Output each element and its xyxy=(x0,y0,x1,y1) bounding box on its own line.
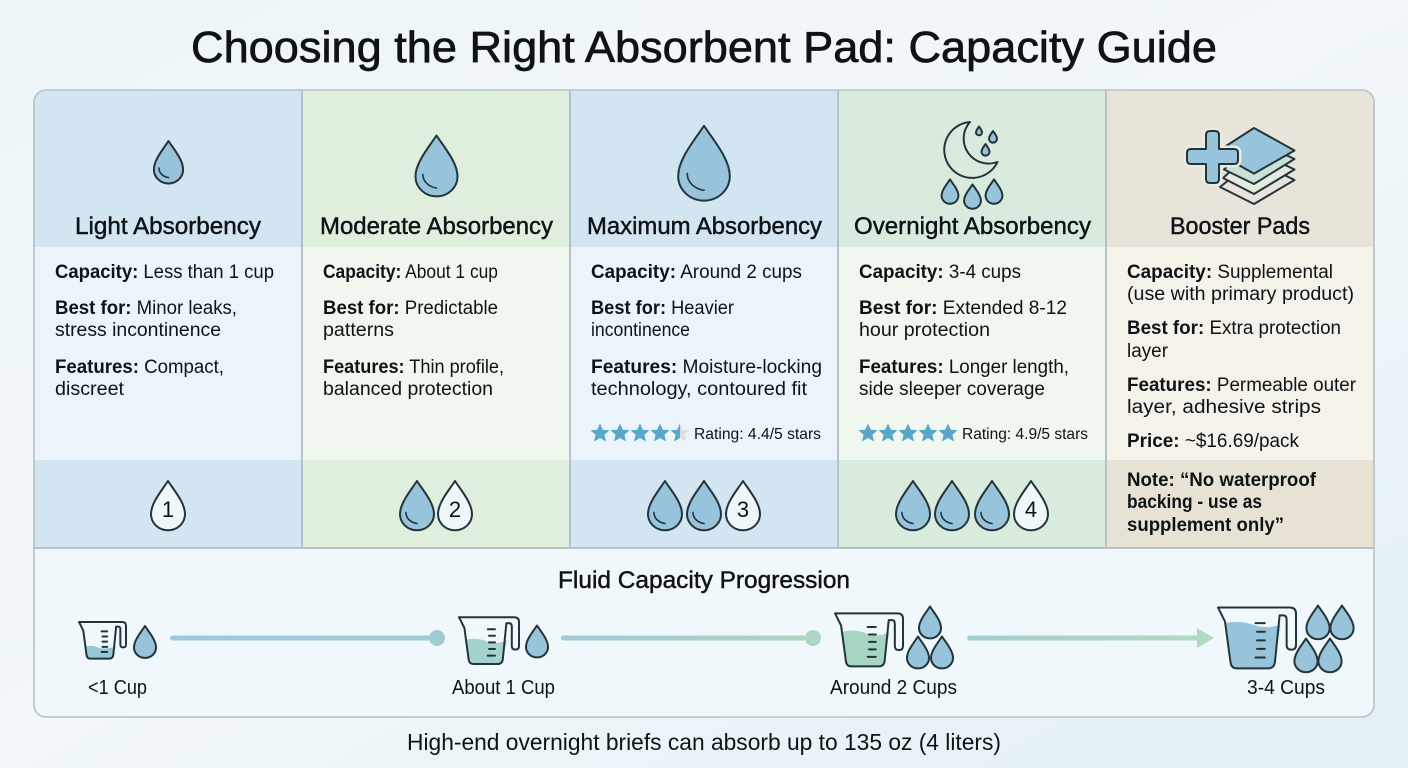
text block: overnight details: side sleeper coverage xyxy=(859,379,1045,400)
text block: maximum details: Capacity: Around 2 cups xyxy=(591,262,802,283)
text block: light details: stress incontinence xyxy=(55,320,221,341)
arrow: segment three xyxy=(967,628,1214,648)
arrow: segment two xyxy=(561,630,821,646)
heading: moderate: Moderate Absorbency xyxy=(320,213,553,240)
text block: booster details: layer, adhesive strips xyxy=(1127,397,1321,418)
label: under one cup: <1 Cup xyxy=(88,677,147,699)
text block: light details: Capacity: Less than 1 cup xyxy=(55,262,274,283)
icon: cup about one xyxy=(459,617,548,664)
text block: moderate details: Capacity: About 1 cup xyxy=(323,262,498,283)
text block: moderate details: Features: Thin profile, xyxy=(323,357,504,378)
text block: light details: Best for: Minor leaks, xyxy=(55,298,237,319)
text block: booster details: Features: Permeable outer xyxy=(1127,375,1357,396)
rating: overnight xyxy=(858,424,1088,443)
column background: moderate xyxy=(302,90,570,548)
text block: overnight details: Capacity: 3-4 cups xyxy=(859,262,1021,283)
icon: level 4 drops: 4 xyxy=(1025,497,1037,522)
callout: booster note: Note: “No waterproof xyxy=(1127,470,1317,491)
panel: comparison table xyxy=(34,90,1374,717)
text block: moderate details: Best for: Predictable xyxy=(323,298,498,319)
text block: overnight details: Features: Longer length, xyxy=(859,357,1069,378)
arrow: segment one xyxy=(170,630,445,646)
text block: booster details: layer xyxy=(1127,341,1169,362)
column background: light xyxy=(34,90,302,548)
icon: moon with drops xyxy=(942,122,1002,209)
text block: moderate details: balanced protection xyxy=(323,379,493,400)
icon: level 4 drops xyxy=(896,481,1048,530)
text block: light details: discreet xyxy=(55,379,125,400)
column background: maximum xyxy=(570,90,838,548)
icon: level 2 drops: 2 xyxy=(449,497,461,522)
text block: moderate details: patterns xyxy=(323,320,394,341)
text block: booster details: Price: ~$16.69/pack xyxy=(1127,431,1299,452)
footnote: High-end overnight briefs can absorb up to 135 oz (4 liters) xyxy=(407,729,1001,755)
callout: booster note xyxy=(1127,470,1317,536)
icon: small drop xyxy=(154,141,183,183)
icon: cup three to four xyxy=(1218,606,1354,672)
text block: overnight details: Best for: Extended 8-12 xyxy=(859,298,1067,319)
icon: level 2 drops xyxy=(400,481,472,530)
label: around two cups: Around 2 Cups xyxy=(830,677,957,699)
text block: overnight details xyxy=(859,262,1069,400)
icon: level 1 drops: 1 xyxy=(162,497,174,522)
icon: booster pads stack xyxy=(1187,128,1294,204)
heading: fluid capacity progression: Fluid Capacity Progression xyxy=(558,567,850,594)
icon: cup around two xyxy=(835,606,953,668)
text block: booster details: (use with primary product) xyxy=(1127,284,1354,305)
text block: maximum details xyxy=(591,262,822,400)
callout: booster note: supplement only” xyxy=(1127,515,1284,536)
text block: booster details xyxy=(1127,262,1357,452)
icon: level 3 drops xyxy=(648,481,760,530)
text block: maximum details: incontinence xyxy=(591,320,690,341)
icon: cup under one xyxy=(79,622,156,659)
icon: large drop xyxy=(678,126,730,201)
text block: moderate details xyxy=(323,262,504,400)
rating: maximum xyxy=(590,424,821,443)
text block: light details xyxy=(55,262,274,400)
text block: overnight details: hour protection xyxy=(859,320,990,341)
heading: overnight: Overnight Absorbency xyxy=(854,213,1091,240)
heading: maximum: Maximum Absorbency xyxy=(587,213,822,240)
label: about one cup: About 1 Cup xyxy=(452,677,555,699)
heading: light: Light Absorbency xyxy=(75,213,261,240)
icon: medium drop xyxy=(416,136,458,196)
text block: maximum details: Best for: Heavier xyxy=(591,298,735,319)
column background: overnight xyxy=(838,90,1106,548)
text block: maximum details: Features: Moisture-locking xyxy=(591,357,822,378)
column background: booster xyxy=(1106,90,1374,548)
rating: overnight: Rating: 4.9/5 stars xyxy=(962,426,1088,443)
text block: booster details: Best for: Extra protection xyxy=(1127,318,1341,339)
callout: booster note: backing - use as xyxy=(1127,492,1262,513)
icon: level 1 drops xyxy=(151,481,185,530)
heading: booster: Booster Pads xyxy=(1170,213,1310,240)
text block: light details: Features: Compact, xyxy=(55,357,224,378)
label: three to four cups: 3-4 Cups xyxy=(1247,677,1325,699)
text block: booster details: Capacity: Supplemental xyxy=(1127,262,1333,283)
rating: maximum: Rating: 4.4/5 stars xyxy=(694,426,821,443)
text block: maximum details: technology, contoured fit xyxy=(591,379,808,400)
title: Choosing the Right Absorbent Pad: Capacity Guide xyxy=(191,23,1217,72)
icon: level 3 drops: 3 xyxy=(737,497,749,522)
